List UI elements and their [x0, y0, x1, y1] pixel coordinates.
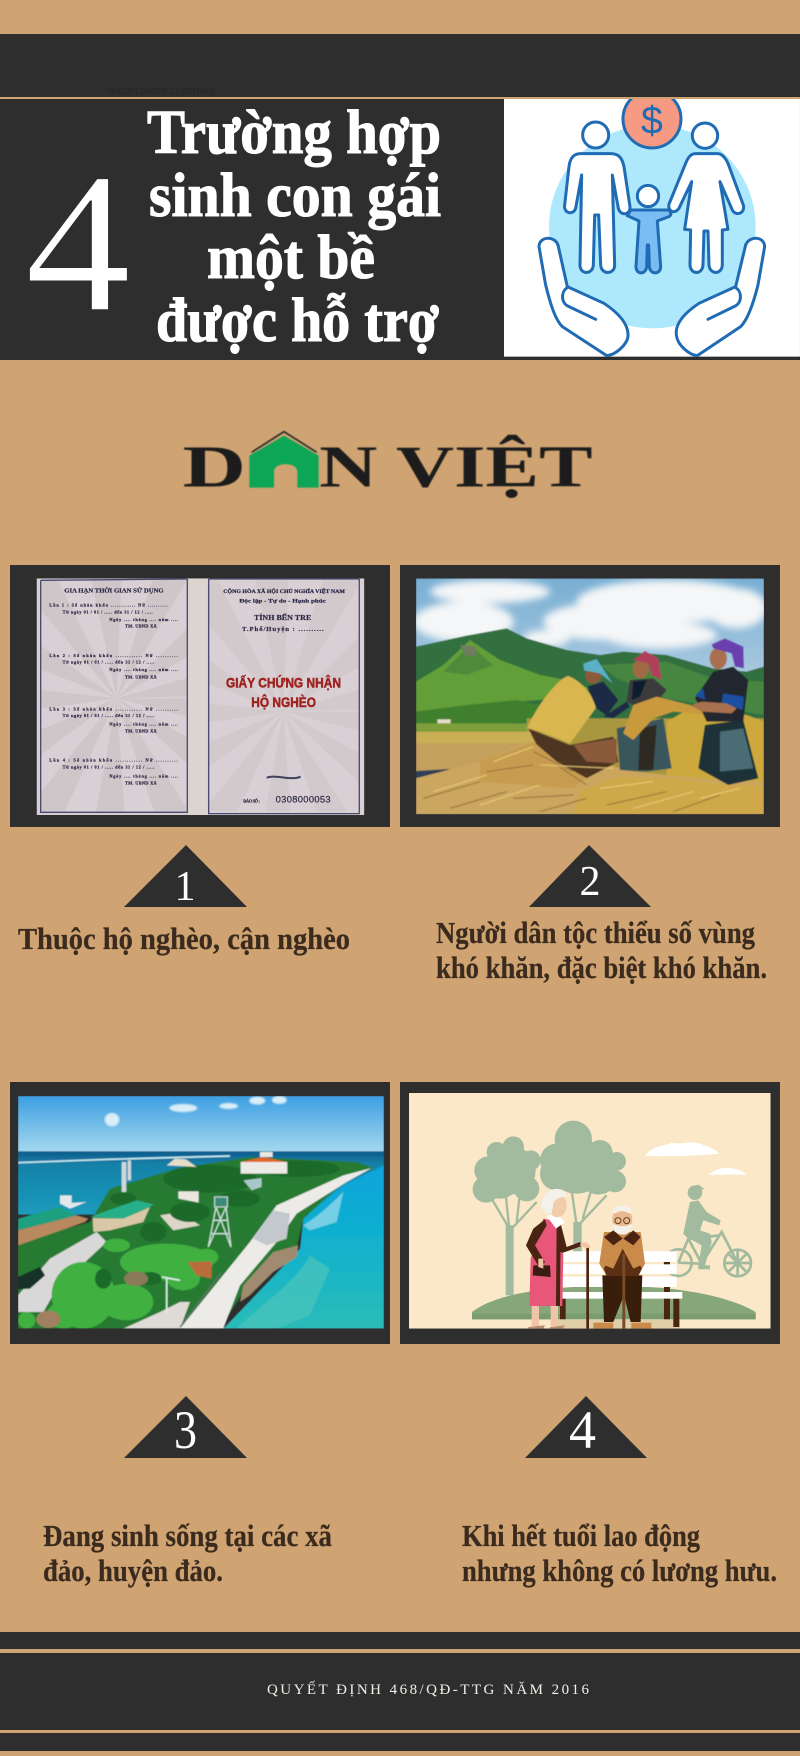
- panel: ethnic minority harvest: [400, 565, 780, 827]
- photo: open booklet: Từ ngày 01 / 01 / ..... đến 31 / 12 / .....: [63, 660, 154, 665]
- photo: open booklet: TỈNH BẾN TRE: [254, 612, 311, 622]
- icon: left hand: [539, 238, 628, 356]
- figure: woman 3: [692, 638, 758, 785]
- photo: open booklet: Lần 2 : Số nhân khẩu ............ Nữ ..........: [49, 653, 178, 658]
- title: một bề: [207, 224, 375, 292]
- photo: open booklet: Từ ngày 01 / 01 / ..... đến 31 / 12 / .....: [63, 610, 153, 615]
- photo: open booklet: T.Phố/Huyện : ..........: [242, 626, 324, 633]
- text: case 2: Người dân tộc thiểu số vùng: [436, 915, 755, 950]
- panel: poverty certificate: [10, 565, 390, 827]
- triangle 1: [124, 845, 247, 910]
- illustration: elderly couple on bench: [409, 1093, 771, 1329]
- photo: open booklet: BÁO SỐ :: [243, 799, 261, 804]
- text: case 1: Thuộc hộ nghèo, cận nghèo: [18, 921, 350, 956]
- footer band: [0, 1632, 800, 1751]
- photo: open booklet: TM. UBND XÃ: [125, 780, 158, 785]
- icon: woman: [669, 123, 744, 272]
- title: sinh con gái: [149, 162, 441, 230]
- figure: woman 1: [583, 659, 618, 716]
- photo: open booklet: CỘNG HÒA XÃ HỘI CHỦ NGHĨA VIỆT NAM: [223, 589, 346, 595]
- title: được hỗ trợ: [156, 287, 439, 355]
- photo: open booklet: GIẤY CHỨNG NHẬN: [226, 673, 341, 690]
- photo: open booklet: Độc lập - Tự do - Hạnh phúc: [239, 599, 327, 605]
- triangle 3: [124, 1396, 247, 1460]
- photo: open booklet: GIA HẠN THỜI GIAN SỬ DỤNG: [64, 587, 164, 595]
- icon: family in hands: [504, 90, 800, 357]
- title: Trường hợp: [147, 99, 441, 167]
- illustration: bench: [560, 1251, 682, 1327]
- triangle 2: 2: [580, 859, 600, 905]
- figure: woman 2: [603, 651, 710, 772]
- illustration: right tree: [540, 1121, 626, 1255]
- icon: coin: $: [641, 98, 663, 142]
- photo: open booklet: Lần 3 : Số nhân khẩu ............ Nữ ..........: [49, 706, 178, 711]
- icon: child: [627, 185, 671, 273]
- photo: open booklet: 0308000053: [276, 795, 331, 805]
- text: case 3: [43, 1518, 332, 1588]
- photo: open booklet: Ngày .... tháng .... năm ....: [109, 774, 178, 779]
- photo: open booklet: Từ ngày 01 / 01 / ..... đến 31 / 12 / .....: [63, 713, 154, 718]
- triangle 3: 3: [174, 1400, 197, 1460]
- triangle 4: 4: [569, 1400, 596, 1460]
- icon: coin: [623, 90, 681, 148]
- photo: open booklet: TM. UBND XÃ: [125, 729, 158, 734]
- photo: open booklet: HỘ NGHÈO: [251, 693, 316, 710]
- triangle 1: 1: [174, 864, 196, 910]
- logo: Dan Viet: D: [183, 434, 246, 500]
- photo: island aerial view: [18, 1096, 384, 1329]
- photo: open booklet: Ngày .... tháng .... năm ....: [109, 722, 178, 727]
- photo: open booklet: Lần 1 : Số nhân khẩu ............ Nữ ..........: [49, 602, 168, 607]
- figure: elderly woman: [526, 1189, 591, 1329]
- photo: open booklet: Từ ngày 01 / 01 / ..... đến 31 / 12 / .....: [63, 765, 154, 770]
- icon: steel tower: [208, 1197, 231, 1247]
- panel: island commune: [10, 1082, 390, 1344]
- text: case 3: đảo, huyện đảo.: [43, 1553, 223, 1588]
- text: case 2: [436, 915, 767, 985]
- logo: Dan Viet: N VIỆT: [319, 434, 593, 500]
- photo: women harvesting rice: [413, 578, 767, 814]
- illustration: cyclist: [665, 1185, 751, 1276]
- title: [147, 99, 441, 355]
- header band: [0, 34, 800, 360]
- figure: elderly man: [593, 1206, 651, 1329]
- footer source text: QUYẾT ĐỊNH 468/QĐ-TTG NĂM 2016: [267, 1681, 590, 1698]
- icon: green house: [249, 432, 319, 488]
- faint brand text: WILDFLOWER CLOTHING: [108, 87, 216, 96]
- illustration: left tree: [473, 1136, 541, 1295]
- photo: open booklet: Ngày .... tháng .... năm ....: [109, 617, 178, 622]
- text: case 3: Đang sinh sống tại các xã: [43, 1518, 332, 1553]
- photo: open booklet: TM. UBND XÃ: [125, 624, 158, 629]
- photo: open booklet: Lần 4 : Số nhân khẩu ............ Nữ ..........: [49, 757, 178, 762]
- triangle 2: [529, 845, 651, 907]
- logo: Dan Viet: [183, 432, 593, 500]
- text: case 4: Khi hết tuổi lao động: [462, 1518, 700, 1553]
- big number 4: 4: [25, 133, 131, 354]
- photo: open booklet: [36, 578, 364, 815]
- photo: open booklet: Ngày .... tháng .... năm ....: [109, 667, 178, 672]
- icon: right hand: [676, 238, 765, 356]
- panel: elderly illustration: [400, 1082, 780, 1344]
- icon: man: [565, 122, 630, 272]
- triangle 4: [525, 1396, 647, 1460]
- text: case 4: [462, 1518, 777, 1588]
- photo: open booklet: TM. UBND XÃ: [125, 674, 158, 679]
